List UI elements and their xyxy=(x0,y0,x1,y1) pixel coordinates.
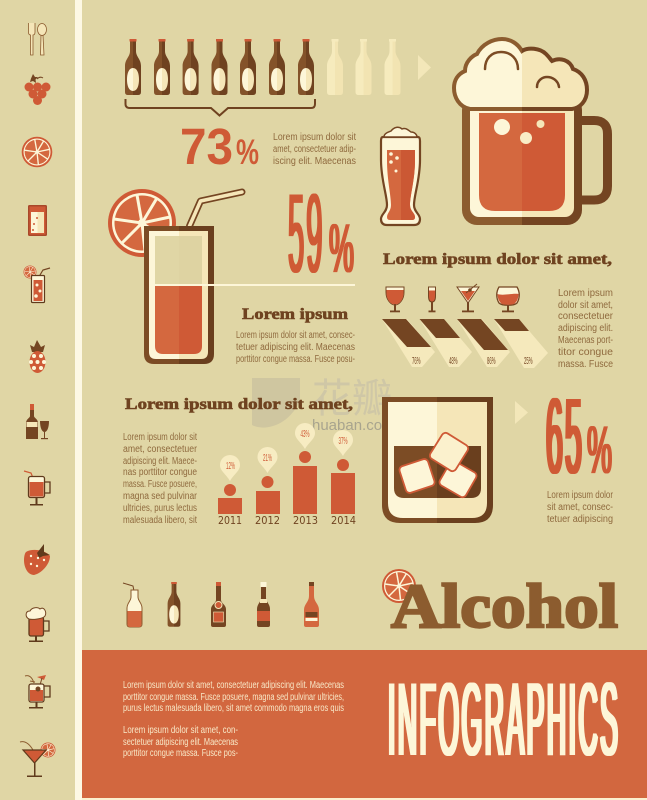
divider line xyxy=(155,284,355,286)
text: % xyxy=(587,412,612,488)
text block: under Lorem ipsum xyxy=(236,330,355,365)
icon: fork and spoon xyxy=(28,23,46,55)
text block: footer paragraph 1: purus lectus malesuada libero, sit amet commodo magna eros quis xyxy=(123,703,344,714)
bracket xyxy=(126,99,315,116)
text block: under Lorem ipsum: Lorem ipsum dolor sit amet, consec- xyxy=(236,330,355,341)
text block: right of glasses: Maecenas port- xyxy=(558,335,613,346)
chevron 76 xyxy=(382,319,435,367)
text block: right of glasses xyxy=(558,288,614,370)
icon: title orange slice xyxy=(382,569,416,603)
icon: snifter xyxy=(497,287,519,312)
chevron 48: 48% xyxy=(449,356,458,367)
bar 2012 xyxy=(255,447,280,527)
text block: right of glasses: titor congue xyxy=(558,347,613,358)
icon: small beer mug xyxy=(26,608,49,642)
chevron 25: 25% xyxy=(524,356,533,367)
icon: wine bottle and glass xyxy=(26,404,49,439)
icon: cocktail glass with orange xyxy=(108,189,242,364)
text block: right of glasses: massa. Fusce xyxy=(558,359,613,370)
icon: strawberry xyxy=(24,544,50,575)
panel: beer bottle pictogram 73% xyxy=(125,39,431,175)
icon: whisky glass with ice xyxy=(382,397,493,523)
icon: martini glass xyxy=(457,284,479,312)
text block: left of bar chart: massa. Fusce posuere, xyxy=(123,479,197,490)
text block: Lorem ipsum dolor sit xyxy=(273,132,356,143)
text block xyxy=(273,132,356,167)
panel: footer band xyxy=(82,650,647,800)
icon: flute xyxy=(428,287,436,312)
handle xyxy=(582,120,608,200)
bar 2013: 43% xyxy=(300,429,310,440)
icon: red bottle xyxy=(304,582,319,627)
text block: footer paragraph 1 xyxy=(123,680,344,714)
straw xyxy=(190,192,242,226)
watermark xyxy=(252,366,395,434)
bar 2011: 2011 xyxy=(218,514,242,527)
title: Alcohol: Alcohol xyxy=(391,573,618,641)
65 percent stat: 65 xyxy=(546,375,584,496)
icon: highball with orange xyxy=(24,266,50,302)
bar 2013 xyxy=(293,423,318,527)
panel: bottom bottle row xyxy=(123,582,319,627)
heading: Lorem ipsum: Lorem ipsum xyxy=(242,306,349,323)
text block: iscing elit. Maecenas xyxy=(273,156,356,167)
chevron 25 xyxy=(494,319,548,368)
text block: under 65 percent xyxy=(547,490,614,525)
icon: mug with straw xyxy=(24,471,50,506)
text block: left of bar chart: Lorem ipsum dolor sit xyxy=(123,432,197,443)
text block: left of bar chart: adipiscing elit. Maece- xyxy=(123,456,197,467)
text block: under 65 percent: sit amet, consec- xyxy=(547,502,613,513)
text block: amet, consectetuer adip- xyxy=(273,144,356,155)
icon: beer bottle xyxy=(168,582,180,627)
chevron 86: 86% xyxy=(487,356,496,367)
bar 2014: 37% xyxy=(338,436,348,447)
icon: wine glass xyxy=(386,287,404,312)
text block: left of bar chart: amet, consectetuer xyxy=(123,444,198,455)
text block: under Lorem ipsum: porttitor congue massa. Fusce posu- xyxy=(236,354,355,365)
icon: juice glass xyxy=(28,205,47,236)
text block: left of bar chart: ultricies, purus lectus xyxy=(123,503,197,514)
text block: right of glasses: consectetuer xyxy=(558,311,614,322)
icon: milk bottle with straw xyxy=(123,583,142,627)
bar 2012: 21% xyxy=(263,453,272,464)
text block: left of bar chart: magna sed pulvinar xyxy=(123,491,198,502)
bar 2014 xyxy=(331,430,356,527)
icon: orange slice xyxy=(22,137,52,167)
bar 2014: 2014 xyxy=(331,514,356,527)
text block: under Lorem ipsum: tetuer adipiscing elit. Maecenas xyxy=(236,342,355,353)
panel: left icon column xyxy=(20,23,55,777)
orange slice xyxy=(108,189,176,257)
text block: left of bar chart: malesuada libero, sit xyxy=(123,515,197,526)
icon: liquor bottle xyxy=(211,582,226,627)
text block: right of glasses: Lorem ipsum xyxy=(558,288,613,299)
bar 2011 xyxy=(218,455,242,527)
text block: footer paragraph 2 xyxy=(123,725,238,759)
white divider stripe xyxy=(75,0,82,800)
text block: right of glasses: adipiscing elit. xyxy=(558,323,613,334)
chevron 86 xyxy=(457,319,510,367)
bottle row xyxy=(125,39,400,95)
text block: under 65 percent: tetuer adipiscing xyxy=(547,514,613,525)
title: INFOGRAPHICS: INFOGRAPHICS xyxy=(388,662,620,778)
text block: left of bar chart xyxy=(123,432,198,526)
bar 2012: 2012 xyxy=(255,514,280,527)
text block: footer paragraph 2: Lorem ipsum dolor sit amet, con- xyxy=(123,725,238,736)
watermark: 花瓣 xyxy=(312,366,392,424)
icon: champagne bottle xyxy=(257,582,270,627)
arrow xyxy=(515,401,528,424)
arrow xyxy=(418,55,431,80)
icon: pineapple xyxy=(29,340,46,373)
text block: right of glasses: dolor sit amet, xyxy=(558,300,613,311)
icon: pint glass xyxy=(381,127,420,225)
text block: footer paragraph 1: porttitor congue massa. Fusce posuere, magna sed pulvinar ultricies, xyxy=(123,692,344,703)
chevron 48 xyxy=(420,319,472,367)
59 percent stat xyxy=(288,172,354,297)
text block: footer paragraph 2: porttitor congue massa. Fusce pos- xyxy=(123,748,238,759)
panel: wine glasses chart xyxy=(382,284,548,368)
heading: glasses section: Lorem ipsum dolor sit amet, xyxy=(383,251,612,268)
text block: left of bar chart: nas porttitor congue xyxy=(123,467,197,478)
59 percent stat: 59 xyxy=(288,172,325,297)
73 percent: % xyxy=(236,133,259,172)
heading: bar chart section: Lorem ipsum dolor sit amet, xyxy=(125,396,353,413)
65 percent stat xyxy=(546,375,612,496)
chevron 76: 76% xyxy=(412,356,421,367)
icon: cocktail mug with umbrella xyxy=(25,675,50,708)
text block: footer paragraph 1: Lorem ipsum dolor sit amet, consectetuer adipiscing elit. Maecenas xyxy=(123,680,344,691)
bar 2011: 12% xyxy=(226,461,235,472)
bar 2013: 2013 xyxy=(293,514,318,527)
text: % xyxy=(329,209,354,287)
73 percent: 73 xyxy=(180,118,233,175)
text block: footer paragraph 2: sectetuer adipiscing elit. Maecenas xyxy=(123,737,238,748)
bar chart xyxy=(218,423,356,527)
icon: martini with orange xyxy=(20,742,55,777)
icon: grapes xyxy=(24,74,50,105)
watermark: huaban.com xyxy=(312,417,395,434)
text block: under 65 percent: Lorem ipsum dolor xyxy=(547,490,614,501)
icon: large beer mug xyxy=(454,39,608,225)
